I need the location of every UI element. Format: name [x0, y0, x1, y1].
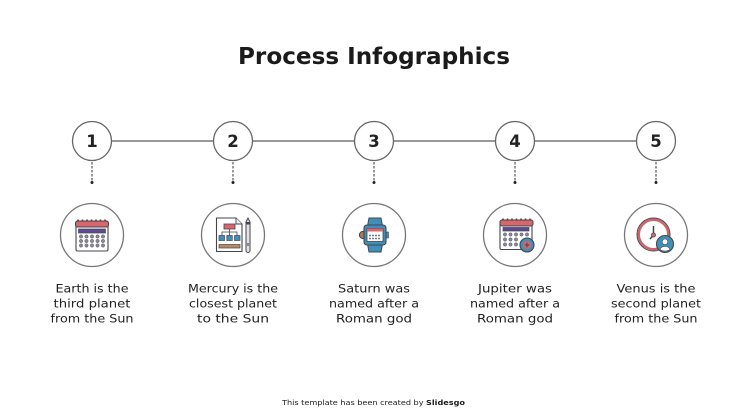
description 1 — [50, 282, 134, 326]
description 2: Mercury is the — [188, 282, 278, 296]
step 3 — [329, 122, 419, 326]
description 1: from the Sun — [50, 312, 134, 326]
step 2 — [188, 122, 278, 326]
dotted connector 1 — [90, 162, 94, 184]
description 5: second planet — [611, 296, 702, 310]
icon: clock with user badge — [624, 204, 688, 266]
description 1: third planet — [54, 296, 131, 310]
step 4 — [470, 122, 560, 326]
icon: calendar — [60, 204, 124, 266]
number badge 2 — [214, 122, 252, 160]
number badge 1 — [72, 122, 112, 160]
number badge 5 — [636, 122, 676, 160]
description 4: Roman god — [477, 312, 553, 326]
description 4: Jupiter was — [477, 282, 552, 296]
description 3 — [329, 282, 419, 326]
description 4 — [470, 282, 560, 326]
description 4: named after a — [470, 296, 560, 310]
dotted connector 5 — [654, 162, 658, 184]
description 3: Saturn was — [338, 282, 410, 296]
description 5 — [611, 282, 702, 326]
title: Process Infographics — [238, 42, 510, 70]
description 2: to the Sun — [197, 312, 269, 326]
description 2 — [188, 282, 278, 326]
icon: document flowchart and pencil — [202, 204, 264, 266]
description 3: Roman god — [336, 312, 412, 326]
icon: calendar with plus badge — [484, 204, 546, 266]
step 5 — [611, 122, 702, 326]
icon: smartwatch — [342, 204, 406, 266]
description 5: from the Sun — [614, 312, 698, 326]
description 3: named after a — [329, 296, 419, 310]
description 2: closest planet — [189, 296, 278, 310]
dotted connector 4 — [514, 162, 516, 184]
description 5: Venus is the — [616, 282, 696, 296]
dotted connector 2 — [232, 162, 234, 184]
number badge 5: 5 — [650, 132, 662, 151]
number badge 4: 4 — [509, 132, 521, 151]
footer credit: This template has been created by Slidesgo — [281, 398, 465, 407]
number badge 2: 2 — [227, 132, 239, 151]
dotted connector 3 — [372, 162, 376, 184]
number badge 1: 1 — [86, 132, 98, 151]
step 1 — [50, 122, 134, 326]
number badge 3 — [354, 122, 394, 160]
description 1: Earth is the — [56, 282, 128, 296]
connector line — [92, 140, 656, 142]
number badge 4 — [496, 122, 534, 160]
number badge 3: 3 — [368, 132, 380, 151]
